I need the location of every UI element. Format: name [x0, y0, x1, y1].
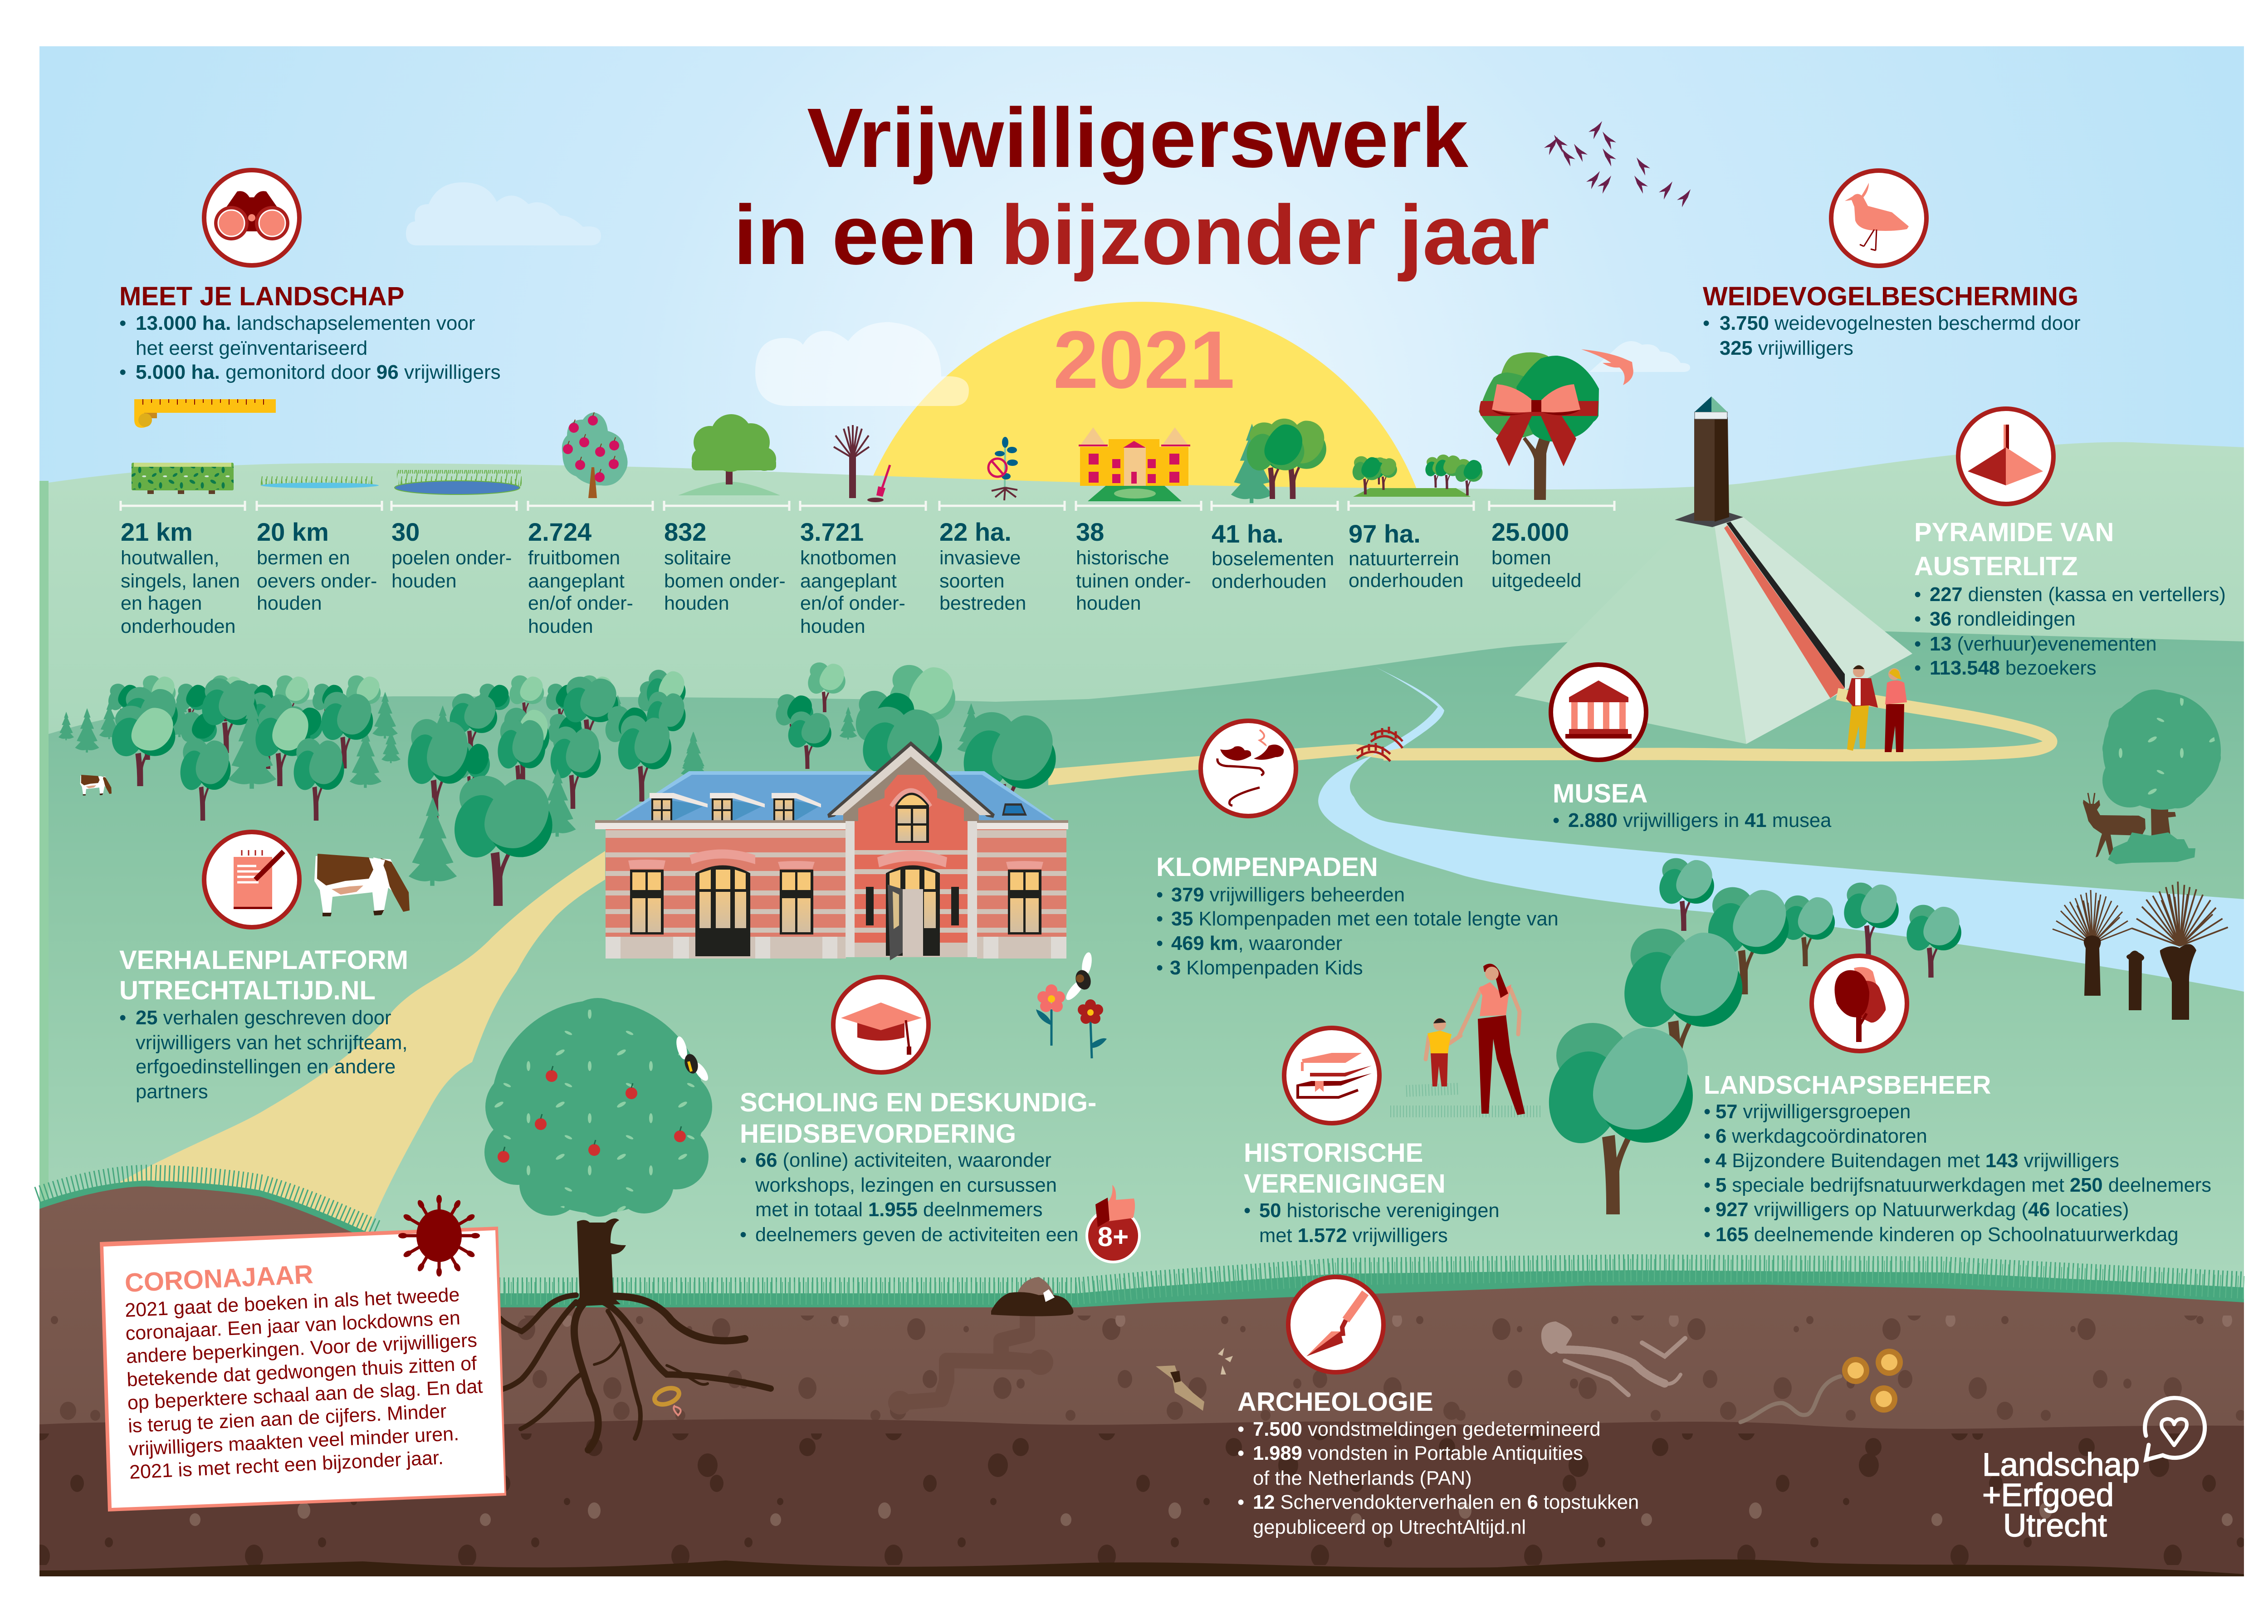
stat: 20 km: 20 km: [257, 518, 329, 546]
text: Klompenpaden: , waaronder: [1238, 933, 1342, 954]
text: Archeologie: 1.989: [1253, 1443, 1302, 1464]
text: Landschapsbeheer: vrijwilligersgroepen: [1743, 1101, 1911, 1123]
text: Meet je landschap: landschapselementen voor: [237, 312, 475, 334]
sky: [39, 46, 2244, 681]
text: Klompenpaden: 3: [1170, 957, 1181, 979]
text: Verhalenplatform: [119, 945, 408, 1103]
text: Pyramide van Austerlitz: rondleidingen: [1957, 608, 2076, 630]
stat: 21 km: singels, lanen: [121, 570, 240, 592]
text: Weidevogelbescherming: •: [1703, 313, 1710, 334]
stat: 30: poelen onder-: [391, 547, 512, 569]
stat: 38: historische: [1076, 547, 1169, 569]
text: Weidevogelbescherming: WEIDEVOGELBESCHERMING: [1703, 282, 2078, 311]
mother and child: [1390, 964, 1542, 1115]
body text: Coronajaar: 2021 is met recht een bijzonder jaar.: [129, 1447, 444, 1483]
icon: pyramid: [1958, 409, 2053, 504]
icon: pollard tree with shovel: [834, 425, 890, 502]
stat: 20 km: houden: [257, 592, 322, 614]
title: in een bijzonder jaar: [733, 188, 1549, 282]
stat: 21 km: [121, 518, 240, 637]
stat: 3.721: knotbomen: [800, 547, 897, 569]
stat: 2.724: [528, 518, 633, 637]
text: Weidevogelbescherming: 3.750: [1720, 313, 1769, 334]
text: Scholing en deskundigheidsbevordering: •: [740, 1150, 747, 1171]
text: Landschapsbeheer: •: [1704, 1224, 1711, 1246]
stat: 22 ha: 22 ha.: [939, 518, 1012, 546]
text: Pyramide van Austerlitz: •: [1914, 608, 1921, 630]
body text: Coronajaar: betekende dat gedwongen thuis zitten of: [126, 1353, 478, 1391]
stat: 25.000: 25.000: [1491, 518, 1569, 546]
text: Meet je landschap: •: [119, 312, 126, 334]
text: Meet je landschap: [119, 282, 501, 383]
stat: 3.721: aangeplant: [800, 570, 897, 592]
stat: 2.724: aangeplant: [528, 570, 625, 592]
sand path to the villa: [94, 851, 605, 1234]
year: 2021: [1053, 314, 1235, 406]
text: Meet je landschap: 13.000 ha.: [136, 312, 231, 334]
soil and grass ground: [39, 1181, 2244, 1576]
text: Pyramide van Austerlitz: 13: [1930, 633, 1951, 655]
text: Musea: vrijwilligers in 41 musea: [1623, 810, 1831, 832]
icon: verge with grass: [261, 476, 379, 488]
pyramid of Austerlitz: [1515, 396, 1912, 744]
text: Archeologie: [1237, 1387, 1639, 1538]
text: Landschapsbeheer: •: [1704, 1101, 1711, 1123]
text: Historische verenigingen: met 1.572 vrijwilligers: [1259, 1225, 1448, 1247]
text: Archeologie: vondstmeldingen gedetermineerd: [1308, 1419, 1601, 1440]
icon: lapwing bird: [1831, 171, 1926, 266]
text: Scholing en deskundigheidsbevordering: •: [740, 1224, 747, 1246]
text: Historische verenigingen: HISTORISCHE: [1244, 1138, 1423, 1168]
text: Weidevogelbescherming: weidevogelnesten beschermd door: [1774, 313, 2081, 334]
icon: coronavirus: [398, 1195, 480, 1277]
text: Musea: 2.880: [1568, 810, 1618, 832]
text: Archeologie: of the Netherlands (PAN): [1253, 1467, 1472, 1489]
stat: 25.000: bomen: [1491, 547, 1551, 569]
text: Landschapsbeheer: deelnemende kinderen op Schoolnatuurwerkdag: [1754, 1224, 2179, 1246]
stat: 21 km: houtwallen,: [121, 547, 220, 569]
villa building: [595, 741, 1068, 960]
text: Historische verenigingen: 50: [1259, 1200, 1281, 1222]
icon: invasive plant crossed out: [988, 437, 1018, 500]
text: Landschapsbeheer: •: [1704, 1199, 1711, 1221]
icon: books: [1284, 1028, 1379, 1123]
stat: 2.724: en/of onder-: [528, 592, 633, 614]
icon: tree: [1812, 956, 1907, 1051]
text: Historische verenigingen: [1244, 1138, 1500, 1247]
gold coins and snake: [1740, 1349, 1903, 1422]
text: Archeologie: •: [1237, 1419, 1244, 1440]
body text: Coronajaar: is terug te zien aan de cijfers. Minder: [127, 1400, 447, 1437]
body text: Coronajaar: [121, 1283, 487, 1483]
text: Klompenpaden: 35: [1171, 908, 1193, 930]
text: Archeologie: vondsten in Portable Antiquities: [1308, 1443, 1583, 1464]
mole hill and tunnel: [888, 1277, 1073, 1414]
text: Scholing en deskundigheidsbevordering: [740, 1088, 1096, 1246]
animal skeleton: [1541, 1321, 1685, 1395]
text: Meet je landschap: 5.000 ha.: [136, 361, 220, 383]
small cow: [80, 775, 112, 796]
stat: 97 ha: natuurterrein: [1349, 548, 1459, 570]
stat: 30: 30: [391, 518, 420, 546]
text: Musea: [1553, 779, 1832, 832]
icon: binoculars: [204, 170, 299, 265]
text: Scholing en deskundigheidsbevordering: HEIDSBEVORDERING: [740, 1119, 1016, 1149]
stat: 3.721: 3.721: [800, 518, 864, 546]
river: [1318, 665, 2244, 992]
broken vase: [1156, 1348, 1233, 1411]
text: Landschapsbeheer: 165: [1716, 1224, 1749, 1246]
text: Archeologie: •: [1237, 1492, 1244, 1513]
body text: Coronajaar: coronajaar. Een jaar van lockdowns en: [125, 1307, 461, 1345]
icon: fruit tree: [562, 412, 628, 498]
text: Meet je landschap: MEET JE LANDSCHAP: [119, 282, 404, 311]
stat: 41 ha: onderhouden: [1212, 571, 1326, 592]
text: Landschapsbeheer: 5: [1716, 1174, 1726, 1196]
text: Scholing en deskundigheidsbevordering: workshops, lezingen en cursussen: [755, 1174, 1057, 1196]
text: Pyramide van Austerlitz: 113.548: [1930, 657, 2000, 679]
forest: [59, 662, 1056, 906]
icon: trowel: [1288, 1277, 1383, 1372]
stat: 30: [391, 518, 512, 592]
back hill: [39, 442, 2244, 771]
text: Musea: •: [1553, 810, 1559, 832]
text: Landschapsbeheer: [1704, 1071, 2211, 1246]
stat: 832: solitaire: [664, 547, 731, 569]
text: Verhalenplatform: verhalen geschreven door: [163, 1007, 391, 1029]
stat: 22 ha: invasieve: [939, 547, 1021, 569]
stat: 41 ha: [1212, 519, 1334, 592]
text: Klompenpaden: Klompenpaden met een totale lengte van: [1198, 908, 1559, 930]
stat: 38: houden: [1076, 592, 1141, 614]
badge: thumbs up 8+: [1087, 1185, 1139, 1262]
text: Pyramide van Austerlitz: (verhuur)evenementen: [1957, 633, 2157, 655]
icon: solitary tree: [678, 414, 780, 495]
text: Landschapsbeheer: •: [1704, 1150, 1711, 1172]
text: Meet je landschap: het eerst geïnventariseerd: [136, 337, 367, 359]
stat: 20 km: oevers onder-: [257, 570, 377, 592]
title: [733, 91, 1549, 282]
stat: 38: [1076, 518, 1191, 614]
body text: Coronajaar: andere beperkingen. Voor de vrijwilligers: [126, 1330, 478, 1368]
text: Verhalenplatform: VERHALENPLATFORM: [119, 945, 408, 975]
text: Klompenpaden: vrijwilligers beheerden: [1210, 884, 1405, 906]
text: Pyramide van Austerlitz: •: [1914, 657, 1921, 679]
stat: 97 ha: onderhouden: [1349, 570, 1463, 592]
stat: 832: [664, 518, 786, 614]
text: Scholing en deskundigheidsbevordering: deelnemers geven de activiteiten een: [755, 1224, 1078, 1246]
text: Verhalenplatform: •: [119, 1007, 126, 1029]
icon: notepad with pencil: [204, 832, 299, 927]
stat: 41 ha: 41 ha.: [1212, 519, 1284, 548]
icon: nature terrain: [1351, 455, 1482, 497]
text: Weidevogelbescherming: 325 vrijwilligers: [1720, 338, 1853, 359]
middle hill: [49, 631, 2244, 1316]
text: Landschapsbeheer: LANDSCHAPSBEHEER: [1704, 1071, 1991, 1100]
big cow: [314, 854, 410, 916]
stat: 832: houden: [664, 592, 729, 614]
logo: Landschap + Erfgoed Utrecht: +Erfgoed: [1982, 1477, 2114, 1513]
stat: 38: 38: [1076, 518, 1104, 546]
text: Historische verenigingen: VERENIGINGEN: [1244, 1169, 1446, 1198]
gold ring: [652, 1385, 681, 1415]
stat: 22 ha: bestreden: [939, 592, 1026, 614]
icon: gift tree with ribbon: [1479, 352, 1599, 500]
icon: museum: [1551, 665, 1646, 760]
card: Coronajaar: [100, 1227, 506, 1511]
icon: pond: [395, 470, 522, 494]
text: Scholing en deskundigheidsbevordering: 66: [755, 1150, 777, 1171]
text: Pyramide van Austerlitz: diensten (kassa en vertellers): [1968, 584, 2226, 606]
icon: flying swallow: [1581, 349, 1633, 385]
text: Scholing en deskundigheidsbevordering: SCHOLING EN DESKUNDIG-: [740, 1088, 1096, 1117]
cloud left: [406, 182, 601, 245]
text: Landschapsbeheer: 57: [1716, 1101, 1737, 1123]
bumblebee and flowers: [1036, 952, 1107, 1058]
text: Musea: MUSEA: [1553, 779, 1647, 808]
body text: Coronajaar: vrijwilligers maakten veel minder uren.: [128, 1423, 459, 1460]
text: Pyramide van Austerlitz: PYRAMIDE VAN: [1914, 518, 2114, 547]
right tree with deer: [2083, 690, 2221, 864]
body text: Coronajaar: 2021 gaat de boeken in als het tweede: [124, 1284, 460, 1321]
icon: woodland group: [1231, 419, 1326, 503]
text: Landschapsbeheer: Bijzondere Buitendagen met 143 vrijwilligers: [1732, 1150, 2119, 1172]
stat: 3.721: en/of onder-: [800, 592, 905, 614]
icon: graduation cap: [833, 977, 929, 1072]
stat: 2.724: houden: [528, 616, 593, 637]
stat: 25.000: uitgedeeld: [1491, 570, 1581, 592]
text: Verhalenplatform: erfgoedinstellingen en andere: [136, 1056, 396, 1078]
body text: Coronajaar: op beperktere schaal aan de slag. En dat: [127, 1375, 483, 1414]
text: Landschapsbeheer: 6: [1716, 1125, 1726, 1147]
stats scale lines: [121, 501, 1614, 511]
stat: 22 ha: soorten: [939, 570, 1004, 592]
stat: 21 km: en hagen: [121, 592, 202, 614]
logo: Landschap + Erfgoed Utrecht: [1982, 1398, 2205, 1544]
text: Klompenpaden: •: [1156, 884, 1163, 906]
text: Landschapsbeheer: •: [1704, 1125, 1711, 1147]
text: Klompenpaden: •: [1156, 957, 1163, 979]
text: Klompenpaden: 379: [1171, 884, 1204, 906]
logo: Landschap + Erfgoed Utrecht: Landschap: [1982, 1447, 2140, 1483]
bridge: [1357, 727, 1403, 761]
text: Klompenpaden: •: [1156, 908, 1163, 930]
text: Klompenpaden: Klompenpaden Kids: [1186, 957, 1363, 979]
text: Archeologie: 12: [1253, 1492, 1275, 1513]
text: Klompenpaden: 469 km: [1171, 933, 1238, 954]
apple tree with roots: [484, 998, 771, 1450]
text: Pyramide van Austerlitz: bezoekers: [2005, 657, 2097, 679]
stat: 38: tuinen onder-: [1076, 570, 1191, 592]
cloud right: [1589, 341, 1690, 372]
stat: 41 ha: boselementen: [1212, 548, 1334, 570]
text: Archeologie: 7.500: [1253, 1419, 1302, 1440]
text: Landschapsbeheer: •: [1704, 1174, 1711, 1196]
text: Verhalenplatform: 25: [136, 1007, 157, 1029]
stat: 2.724: 2.724: [528, 518, 591, 546]
pollard willows: [2053, 881, 2228, 1020]
text: Archeologie: Schervendokterverhalen en 6 topstukken: [1280, 1492, 1639, 1513]
text: Scholing en deskundigheidsbevordering: met in totaal 1.955 deelnmemers: [755, 1199, 1043, 1221]
text: Pyramide van Austerlitz: 227: [1930, 584, 1963, 606]
text: Archeologie: •: [1237, 1443, 1244, 1464]
stat: 97 ha: [1349, 519, 1463, 592]
text: Pyramide van Austerlitz: [1914, 518, 2226, 679]
text: Verhalenplatform: partners: [136, 1081, 208, 1103]
stat: 97 ha: 97 ha.: [1349, 519, 1421, 548]
text: Klompenpaden: KLOMPENPADEN: [1156, 852, 1378, 882]
text: Landschapsbeheer: vrijwilligers op Natuurwerkdag (46 locaties): [1754, 1199, 2129, 1221]
stat: 3.721: houden: [800, 616, 865, 637]
text: Verhalenplatform: vrijwilligers van het schrijfteam,: [136, 1032, 408, 1054]
title: Vrijwilligerswerk: [807, 91, 1468, 185]
text: Klompenpaden: •: [1156, 933, 1163, 954]
heading: Coronajaar: CORONAJAAR: [124, 1259, 314, 1298]
stat: 2.724: fruitbomen: [528, 547, 620, 569]
icon: measuring tape: [134, 399, 276, 428]
text: Historische verenigingen: •: [1244, 1200, 1251, 1222]
logo: Landschap + Erfgoed Utrecht: Utrecht: [2003, 1508, 2107, 1544]
stat: 25.000: [1491, 518, 1581, 592]
text: Pyramide van Austerlitz: •: [1914, 633, 1921, 655]
text: Archeologie: ARCHEOLOGIE: [1237, 1387, 1433, 1417]
text: Pyramide van Austerlitz: •: [1914, 584, 1921, 606]
stat: 3.721: [800, 518, 905, 637]
text: Landschapsbeheer: 4: [1716, 1150, 1726, 1172]
text: Meet je landschap: •: [119, 361, 126, 383]
text: Pyramide van Austerlitz: AUSTERLITZ: [1914, 552, 2078, 581]
stat: 30: houden: [391, 570, 456, 592]
badge: thumbs up 8+: 8+: [1098, 1222, 1129, 1252]
text: Verhalenplatform: UTRECHTALTIJD.NL: [119, 976, 376, 1005]
text: Pyramide van Austerlitz: 36: [1930, 608, 1951, 630]
stat: 20 km: bermen en: [257, 547, 350, 569]
sun: [861, 302, 1423, 508]
walking couple: [1846, 665, 1907, 752]
text: Scholing en deskundigheidsbevordering: (online) activiteiten, waaronder: [782, 1150, 1051, 1171]
icon: clogs and path: [1201, 721, 1296, 816]
text: Landschapsbeheer: 927: [1716, 1199, 1749, 1221]
left hill strip: [39, 481, 49, 1229]
stat: 832: 832: [664, 518, 706, 546]
text: Weidevogelbescherming: [1703, 282, 2081, 359]
stat: 832: bomen onder-: [664, 570, 786, 592]
stat: 21 km: 21 km: [121, 518, 193, 546]
cloud centre: [755, 322, 969, 406]
text: Archeologie: gepubliceerd op UtrechtAltijd.nl: [1253, 1516, 1526, 1538]
sand paths on the right: [1048, 694, 2051, 785]
icon: hedge: [132, 463, 234, 494]
text: Meet je landschap: gemonitord door 96 vrijwilligers: [225, 361, 501, 383]
text: Klompenpaden: [1156, 852, 1559, 979]
icon: historic garden house: [1079, 427, 1190, 501]
stat: 22 ha: [939, 518, 1026, 614]
stat: 21 km: onderhouden: [121, 616, 235, 637]
stat: 20 km: [257, 518, 377, 614]
text: Landschapsbeheer: werkdagcoördinatoren: [1732, 1125, 1927, 1147]
text: Historische verenigingen: historische verenigingen: [1286, 1200, 1500, 1222]
riverside trees: [1540, 858, 1961, 1214]
text: Landschapsbeheer: speciale bedrijfsnatuurwerkdagen met 250 deelnemers: [1732, 1174, 2211, 1196]
flock of birds: [1544, 121, 1691, 207]
